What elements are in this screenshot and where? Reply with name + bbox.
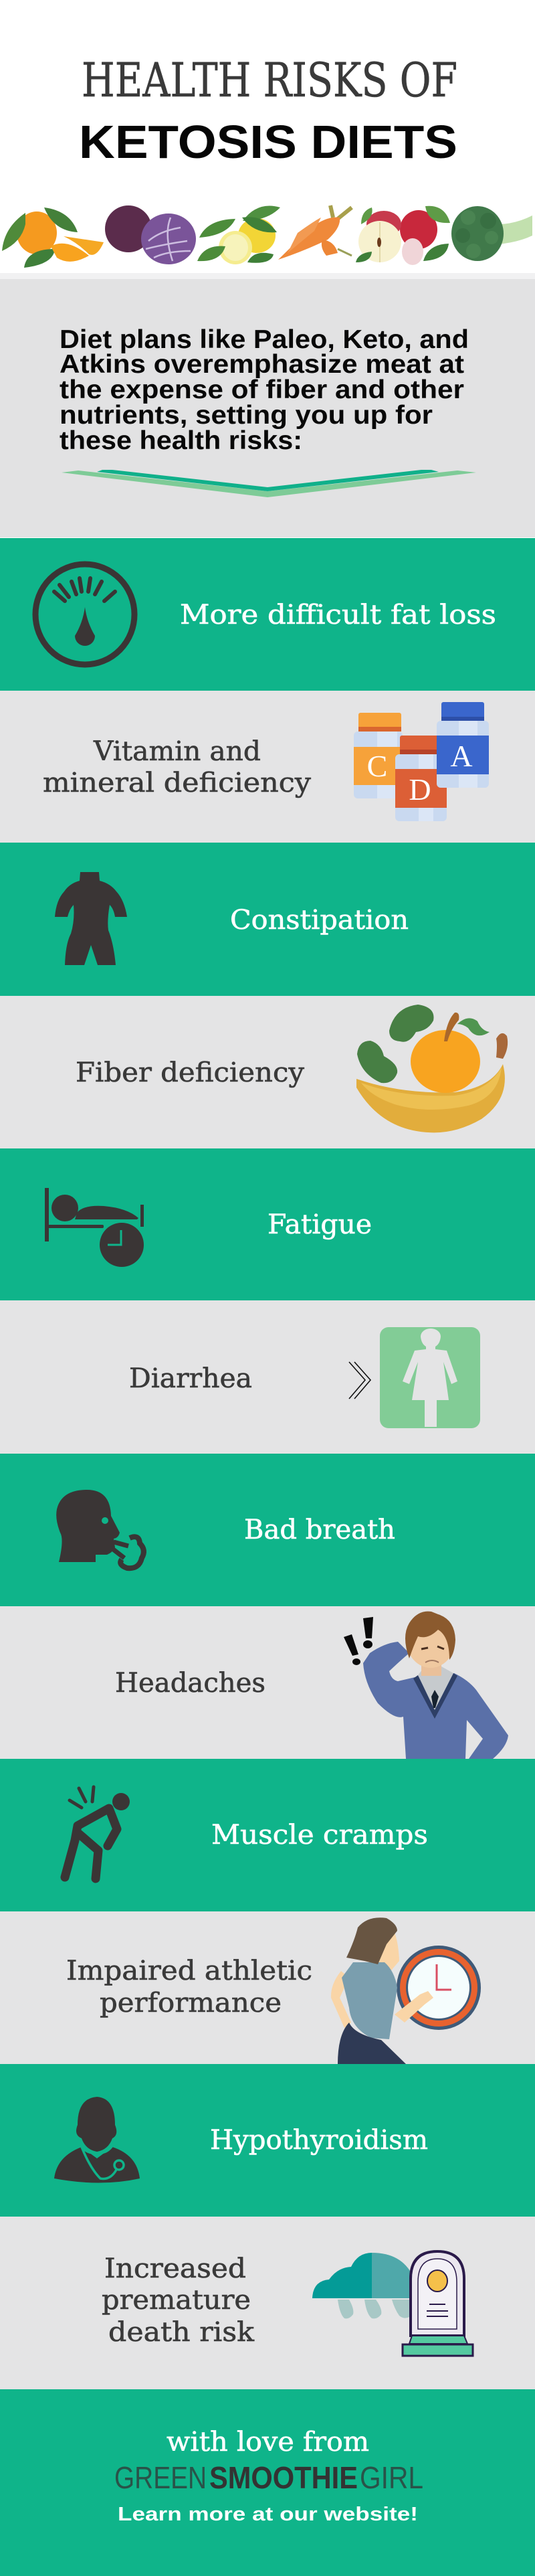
label: mineral deficiency: [43, 768, 311, 798]
icon: gauge: [35, 564, 134, 665]
label: Headaches: [115, 1668, 265, 1699]
icon: fruit and beans: [356, 1005, 508, 1132]
arrow: down chevron: [62, 470, 476, 497]
panel: footer: [0, 2389, 535, 2576]
panel: impaired athletic performance: [0, 1911, 535, 2064]
label: Diarrhea: [129, 1363, 252, 1394]
label: More difficult fat loss: [180, 600, 496, 630]
icon: bed and clock: [45, 1188, 144, 1267]
icon: doctor with stethoscope: [54, 2097, 140, 2183]
icon: person with back pain: [65, 1787, 130, 1879]
panel: constipation: [0, 843, 535, 996]
label: Hypothyroidism: [210, 2125, 428, 2156]
label: Increased: [104, 2253, 246, 2284]
label: Bad breath: [244, 1515, 395, 1545]
label: Constipation: [230, 905, 409, 936]
intro paragraph: Diet plans like Paleo, Keto, and: [60, 325, 469, 354]
intro paragraph: [60, 325, 469, 455]
panel: muscle cramps: [0, 1759, 535, 1911]
icon: runner and clock: [331, 1917, 481, 2064]
icon: vitamin bottles: D: [409, 772, 431, 806]
label: [43, 736, 311, 798]
icon: vitamin bottles: [354, 702, 489, 821]
panel: bad breath: [0, 1454, 535, 1606]
intro paragraph: nutrients, setting you up for: [60, 401, 433, 430]
panel: introduction: [0, 273, 535, 537]
panel: hypothyroidism: [0, 2064, 535, 2217]
icon: head with breath: [56, 1490, 144, 1568]
label: Vitamin and: [93, 736, 261, 767]
label: [102, 2253, 255, 2348]
label: [66, 1956, 312, 2019]
intro paragraph: these health risks:: [60, 426, 302, 455]
sign-off text: with love from: [167, 2427, 369, 2458]
logo wordmark: GIRL: [360, 2460, 423, 2495]
title: [79, 53, 457, 168]
icon: vitamin bottles: C: [367, 749, 387, 783]
label: premature: [102, 2285, 251, 2316]
panel: vitamin and mineral deficiency: [0, 691, 535, 843]
panel: diarrhea: [0, 1300, 535, 1454]
title: KETOSIS DIETS: [79, 116, 457, 168]
logo wordmark: SMOOTHIE: [209, 2460, 358, 2495]
icon: man with headache: [344, 1612, 508, 1759]
label: death risk: [108, 2317, 255, 2348]
intro paragraph: the expense of fiber and other: [60, 375, 464, 404]
panel: more difficult fat loss: [0, 538, 535, 691]
icon: cloud and tombstone: [312, 2251, 473, 2356]
panel: increased premature death risk: [0, 2217, 535, 2389]
website call to action: Learn more at our website!: [118, 2504, 418, 2525]
icon: torso: [55, 872, 127, 965]
panel: headaches: [0, 1606, 535, 1759]
logo wordmark: GREEN: [114, 2460, 207, 2495]
logo wordmark: [114, 2460, 423, 2495]
intro paragraph: Atkins overemphasize meat at: [60, 350, 464, 379]
panel: fatigue: [0, 1148, 535, 1300]
label: Muscle cramps: [211, 1820, 428, 1851]
label: performance: [100, 1988, 282, 2019]
title: HEALTH RISKS OF: [82, 53, 457, 108]
fruit and vegetable row: [2, 205, 532, 268]
label: Fatigue: [268, 1209, 372, 1240]
label: Impaired athletic: [66, 1956, 312, 1986]
icon: vitamin bottles: A: [450, 739, 473, 773]
icon: double chevron: [349, 1362, 370, 1399]
panel: fiber deficiency: [0, 996, 535, 1148]
icon: woman on green tile: [380, 1327, 480, 1428]
label: Fiber deficiency: [76, 1057, 304, 1088]
